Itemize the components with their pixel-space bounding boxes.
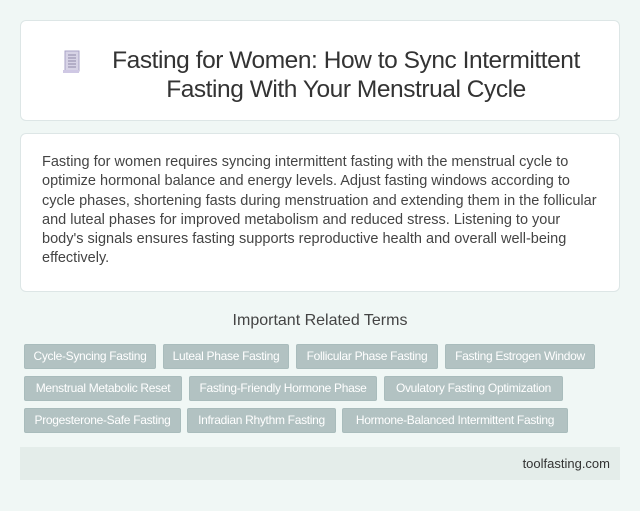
footer text: toolfasting.com — [523, 456, 610, 471]
text block: description: Fasting for women requires syncing intermittent fasting with the menstrual cycle to — [42, 154, 568, 170]
footer — [20, 447, 620, 480]
tags: Fasting Estrogen Window — [455, 349, 585, 363]
heading: related terms: Important Related Terms — [233, 312, 407, 329]
text block: description: body's signals ensures fasting supports reproductive health and overall well-being — [42, 231, 566, 247]
tags: Progesterone-Safe Fasting — [35, 413, 170, 427]
text block: description: effectively. — [42, 250, 109, 266]
tags: Fasting-Friendly Hormone Phase — [199, 381, 367, 395]
icon: document — [63, 50, 80, 73]
tags: Luteal Phase Fasting — [173, 349, 279, 363]
title — [112, 47, 580, 103]
tags: Hormone-Balanced Intermittent Fasting — [356, 413, 554, 427]
tags: Cycle-Syncing Fasting — [33, 349, 147, 363]
title: Fasting With Your Menstrual Cycle — [166, 76, 526, 103]
title: Fasting for Women: How to Sync Intermittent — [112, 47, 580, 74]
text block: description — [42, 154, 597, 266]
text block: description: cycle phases, shortening fasts during menstruation and extending them in the follicular — [42, 193, 597, 209]
tags: Menstrual Metabolic Reset — [36, 381, 170, 395]
tags: Follicular Phase Fasting — [307, 349, 427, 363]
panel: description — [20, 133, 620, 292]
tags: Infradian Rhythm Fasting — [198, 413, 325, 427]
text block: description: and luteal phases for improved metabolism and reduced stress. Listening to your — [42, 212, 560, 228]
panel: title card — [20, 20, 620, 121]
text block: description: optimize hormonal balance and energy levels. Adjust fasting windows according to — [42, 173, 570, 189]
tags: Ovulatory Fasting Optimization — [396, 381, 551, 395]
